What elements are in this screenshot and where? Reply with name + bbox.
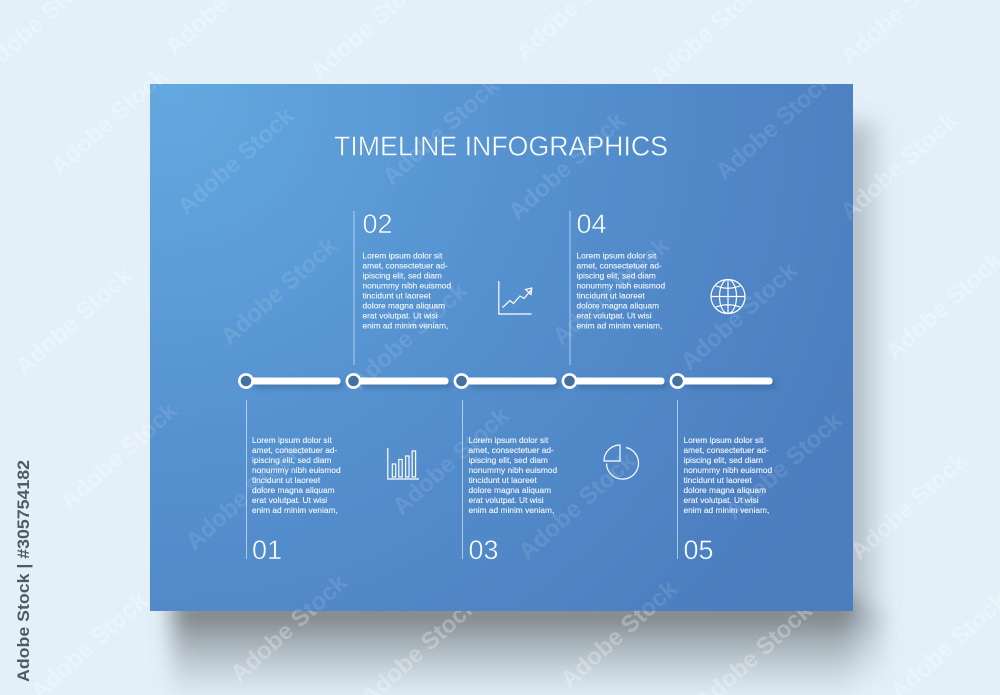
- step 03: tincidunt ut laoreet: [468, 475, 537, 485]
- watermarks on card: Adobe Stock: [513, 447, 641, 566]
- step 02: dolore magna aliquam: [362, 300, 445, 310]
- step 02: ipiscing elit, sed diam: [362, 270, 442, 280]
- step 02: erat volutpat. Ut wisi: [362, 310, 438, 320]
- step 02: 02: [362, 209, 393, 239]
- step 05: dolore magna aliquam: [684, 485, 766, 495]
- step 01: 01: [252, 535, 282, 565]
- step 01: enim ad minim veniam,: [252, 505, 338, 515]
- step 01: ipiscing elit, sed diam: [252, 455, 331, 465]
- step 05: 05: [684, 535, 714, 565]
- watermarks on background: Adobe Stock: [45, 62, 173, 181]
- watermarks on card: Adobe Stock: [225, 569, 353, 688]
- step 05: erat volutpat. Ut wisi: [684, 495, 759, 505]
- panel: blue card: [150, 84, 853, 611]
- watermarks on background: Adobe Stock: [55, 397, 183, 516]
- watermarks on card: Adobe Stock: [835, 107, 963, 226]
- step 05: enim ad minim veniam,: [684, 505, 769, 515]
- icon: bar chart: [388, 448, 419, 479]
- step 04: enim ad minim veniam,: [576, 320, 662, 330]
- step 01: Lorem ipsum dolor sit: [252, 435, 332, 445]
- step 05: nonummy nibh euismod: [684, 465, 772, 475]
- step 01: [246, 400, 419, 565]
- step 05: [678, 400, 774, 565]
- step 04: tincidunt ut laoreet: [576, 290, 645, 300]
- step 02: [354, 209, 532, 365]
- step 02: enim ad minim veniam,: [362, 320, 448, 330]
- watermarks on card: Adobe Stock: [555, 575, 683, 694]
- watermarks on card: Adobe Stock: [345, 277, 473, 396]
- step 04: 04: [576, 209, 607, 239]
- watermarks on background: Adobe Stock: [835, 107, 963, 226]
- icon: line chart: [499, 281, 532, 314]
- watermarks on card: [150, 84, 853, 611]
- step 03: amet, consectetuer ad-: [468, 445, 554, 455]
- step 02: nonummy nibh euismod: [362, 280, 451, 290]
- watermarks on card: Adobe Stock: [720, 407, 848, 526]
- watermarks on card: Adobe Stock: [503, 107, 631, 226]
- watermarks on card: Adobe Stock: [547, 232, 675, 351]
- step 03: 03: [468, 535, 499, 565]
- watermarks on card: Adobe Stock: [55, 397, 183, 516]
- step 03: ipiscing elit, sed diam: [468, 455, 548, 465]
- step 05: tincidunt ut laoreet: [684, 475, 752, 485]
- watermarks on card: Adobe Stock: [172, 102, 300, 221]
- step 01: tincidunt ut laoreet: [252, 475, 321, 485]
- step 04: ipiscing elit, sed diam: [576, 270, 656, 280]
- step 03: enim ad minim veniam,: [468, 505, 554, 515]
- timeline bar shadows: [254, 381, 776, 388]
- watermarks on background: Adobe Stock: [845, 447, 973, 566]
- watermarks on card: Adobe Stock: [675, 257, 803, 376]
- step 01: erat volutpat. Ut wisi: [252, 495, 327, 505]
- step 02: Lorem ipsum dolor sit: [362, 250, 443, 260]
- icon: globe: [711, 280, 745, 314]
- step 04: amet, consectetuer ad-: [576, 260, 662, 270]
- step 02: amet, consectetuer ad-: [362, 260, 448, 270]
- icon: pie chart: [604, 445, 638, 479]
- step 04: [570, 209, 745, 365]
- watermarks on card: Adobe Stock: [180, 437, 308, 556]
- step 05: amet, consectetuer ad-: [684, 445, 769, 455]
- watermarks on card: Adobe Stock: [710, 67, 838, 186]
- step 03: [462, 400, 638, 565]
- step 04: erat volutpat. Ut wisi: [576, 310, 652, 320]
- step 04: dolore magna aliquam: [576, 300, 659, 310]
- watermarks on card: Adobe Stock: [387, 402, 515, 521]
- watermarks on background: Adobe Stock: [555, 575, 683, 694]
- step 03: nonummy nibh euismod: [468, 465, 557, 475]
- step 01: amet, consectetuer ad-: [252, 445, 338, 455]
- step 01: dolore magna aliquam: [252, 485, 335, 495]
- watermarks on background: Adobe Stock: [225, 569, 353, 688]
- step 05: ipiscing elit, sed diam: [684, 455, 763, 465]
- step 01: nonummy nibh euismod: [252, 465, 341, 475]
- step 03: erat volutpat. Ut wisi: [468, 495, 544, 505]
- timeline: [239, 374, 776, 388]
- timeline bars: [250, 378, 772, 384]
- watermarks on background: Adobe Stock: [10, 262, 138, 381]
- step 04: Lorem ipsum dolor sit: [576, 250, 657, 260]
- card shadow: [172, 122, 884, 695]
- step 03: Lorem ipsum dolor sit: [468, 435, 549, 445]
- timeline nodes: [239, 374, 684, 388]
- watermarks on card: Adobe Stock: [215, 232, 343, 351]
- step 05: Lorem ipsum dolor sit: [684, 435, 764, 445]
- side credit text: Adobe Stock | #305754182: [14, 460, 33, 682]
- watermarks on card: Adobe Stock: [377, 72, 505, 191]
- step 04: nonummy nibh euismod: [576, 280, 665, 290]
- title: TIMELINE INFOGRAPHICS: [334, 131, 668, 162]
- step 03: dolore magna aliquam: [468, 485, 551, 495]
- step 02: tincidunt ut laoreet: [362, 290, 431, 300]
- watermarks on card: Adobe Stock: [45, 62, 173, 181]
